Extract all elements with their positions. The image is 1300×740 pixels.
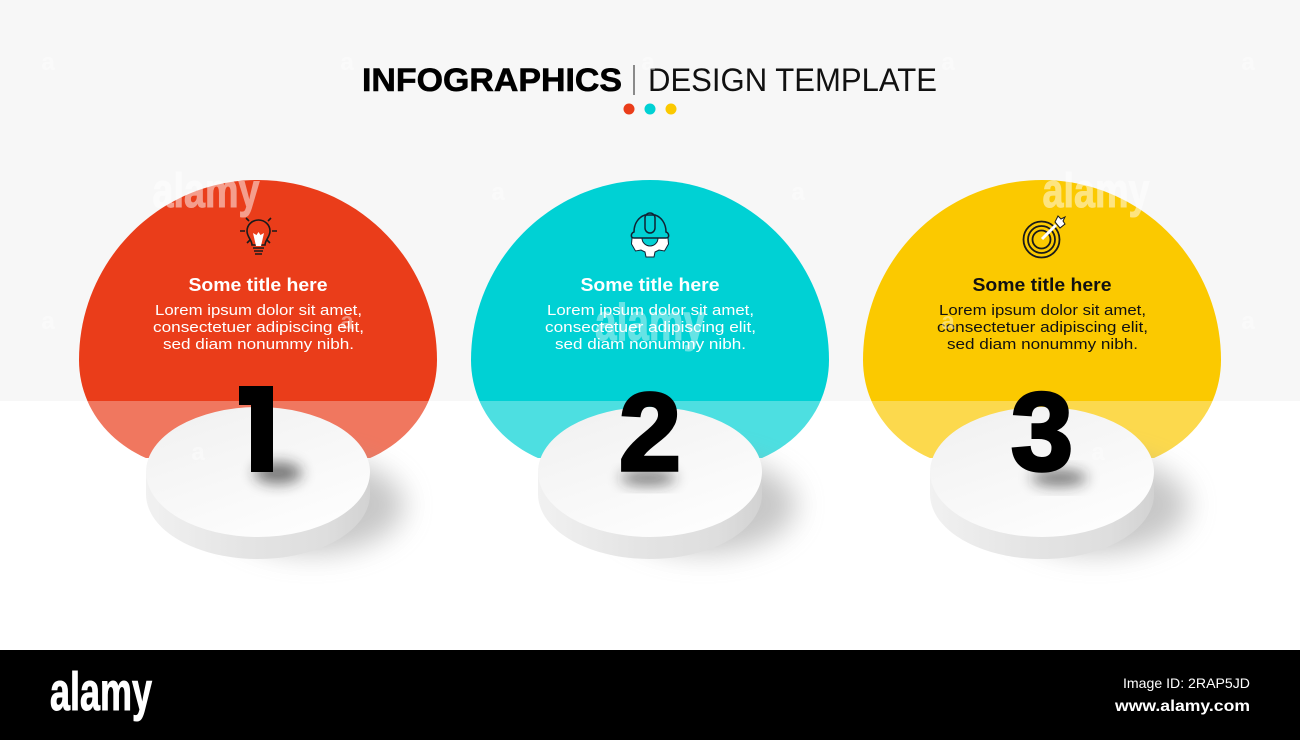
watermarks: a xyxy=(340,49,354,76)
watermarks: a xyxy=(791,439,805,466)
step title: Some title here xyxy=(972,275,1112,295)
step title: Some title here xyxy=(188,275,328,295)
icon: helmet with gear xyxy=(631,213,669,257)
step description: sed diam nonummy nibh. xyxy=(163,336,354,353)
watermarks: alamy xyxy=(595,294,705,352)
step description: Lorem ipsum dolor sit amet, xyxy=(547,302,754,319)
pedestal disc xyxy=(146,407,370,559)
watermarks: a xyxy=(491,179,505,206)
number 1: 1 xyxy=(233,379,291,495)
background upper band xyxy=(0,0,1300,401)
footer bar xyxy=(0,650,1300,740)
watermarks: a xyxy=(191,439,205,466)
disc cast shadow xyxy=(612,457,796,553)
title xyxy=(362,62,937,98)
teal rounded shape xyxy=(462,180,842,471)
title accent dots xyxy=(624,104,676,114)
background lower band xyxy=(0,401,1300,650)
watermarks: a xyxy=(941,308,955,335)
number shadow xyxy=(620,471,676,485)
number 3: 3 xyxy=(1011,371,1073,494)
watermarks: a xyxy=(340,308,354,335)
red rounded shape xyxy=(70,180,450,471)
watermarks: a xyxy=(491,439,505,466)
disc cast shadow xyxy=(220,457,404,553)
step description xyxy=(545,302,756,353)
watermarks: a xyxy=(41,308,55,335)
watermarks: a xyxy=(641,49,655,76)
watermarks xyxy=(41,49,1255,466)
step description: sed diam nonummy nibh. xyxy=(555,336,746,353)
step description xyxy=(153,302,364,353)
watermarks: a xyxy=(1241,49,1255,76)
title: DESIGN TEMPLATE xyxy=(648,62,937,98)
pedestal disc xyxy=(538,407,762,559)
number 1 xyxy=(239,386,273,472)
website: www.alamy.com xyxy=(1114,698,1250,715)
step description: consectetuer adipiscing elit, xyxy=(545,319,756,336)
disc cast shadow xyxy=(1004,457,1188,553)
number shadow xyxy=(1031,470,1087,486)
step description: consectetuer adipiscing elit, xyxy=(153,319,364,336)
watermarks: alamy xyxy=(152,165,260,218)
panel: step 3 xyxy=(854,180,1234,559)
yellow rounded shape xyxy=(854,180,1234,471)
step description: sed diam nonummy nibh. xyxy=(947,336,1138,353)
icon: light bulb xyxy=(240,218,277,254)
footer logo: alamy xyxy=(50,662,152,722)
panel: step 2 xyxy=(462,180,842,559)
pedestal disc xyxy=(930,407,1154,559)
watermarks: a xyxy=(41,49,55,76)
watermarks: alamy xyxy=(1042,165,1150,218)
watermarks: a xyxy=(941,49,955,76)
watermarks: a xyxy=(1091,439,1105,466)
watermarks: a xyxy=(791,179,805,206)
image id: Image ID: 2RAP5JD xyxy=(1123,675,1250,691)
number 2: 2 xyxy=(619,371,681,494)
step description xyxy=(937,302,1148,353)
step description: consectetuer adipiscing elit, xyxy=(937,319,1148,336)
panel: step 1 xyxy=(70,180,450,559)
step title: Some title here xyxy=(580,275,720,295)
step description: Lorem ipsum dolor sit amet, xyxy=(155,302,362,319)
title: INFOGRAPHICS xyxy=(362,62,622,98)
step description: Lorem ipsum dolor sit amet, xyxy=(939,302,1146,319)
icon: target with arrow xyxy=(1024,216,1065,258)
watermarks: a xyxy=(1241,308,1255,335)
number shadow xyxy=(254,462,302,484)
